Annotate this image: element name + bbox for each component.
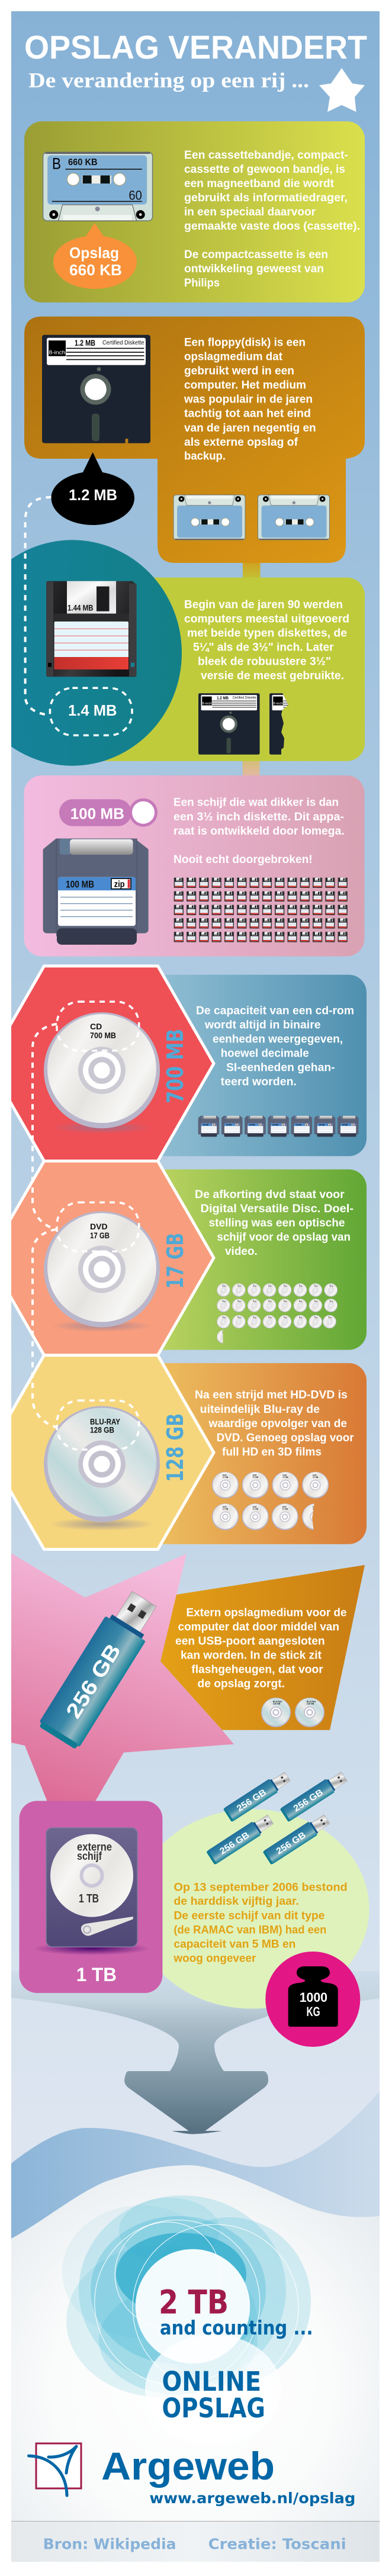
arrow tip xyxy=(172,2131,222,2134)
icon: usb stick: 256 GB xyxy=(61,1640,126,1722)
text: usb description: de opslag zorgt. xyxy=(198,1678,285,1690)
icon grid: cds xyxy=(217,1283,338,1344)
text: cassette description: De compactcassette is een xyxy=(184,249,328,261)
callout: 660 KB: 660 KB xyxy=(69,261,122,279)
heading: online opslag: OPSLAG xyxy=(162,2393,265,2424)
dashed bubble: 1.4 MB: 1.4 MB xyxy=(68,701,117,719)
text: zip description: raat is ontwikkeld door Iomega. xyxy=(173,825,345,838)
callout: 660 KB xyxy=(53,223,137,289)
brand name: Argeweb xyxy=(101,2444,275,2488)
text: floppy description: tachtig tot aan het eind xyxy=(184,408,311,420)
text: 3.5 inch description: met beide typen diskettes, de xyxy=(187,627,347,640)
panel: blu-ray text xyxy=(162,1363,367,1544)
text: blu-ray description: DVD. Genoeg opslag voor xyxy=(217,1432,354,1444)
panel: 3.5 inch floppy xyxy=(0,540,365,766)
teal circle xyxy=(0,540,182,766)
footer xyxy=(11,2521,380,2562)
callout: 1.2 MB: 1.2 MB xyxy=(69,486,117,504)
text: floppy description: opslagmedium dat xyxy=(184,350,283,363)
dvd disc group xyxy=(44,1202,160,1332)
text: usb description: flashgeheugen, dat voor xyxy=(191,1664,323,1676)
callout: 660 KB: Opslag xyxy=(69,244,119,262)
text: floppy description: van de jaren negentig en xyxy=(184,422,316,434)
text: cd description: teerd worden. xyxy=(221,1076,297,1089)
text: floppy description: backup. xyxy=(184,450,226,463)
subtitle: De verandering op een rij ... xyxy=(28,69,309,92)
capacity: 128 GB: 128 GB xyxy=(162,1413,188,1482)
text: hard disk description: capaciteit van 5 MB en xyxy=(173,1939,295,1951)
dashed bubble: 1.4 MB xyxy=(50,688,132,735)
text: cd description: SI-eenheden gehan- xyxy=(226,1062,335,1074)
connector xyxy=(243,563,261,578)
footer: Creatie: Toscani xyxy=(208,2536,346,2552)
text: usb description: Extern opslagmedium voor de xyxy=(186,1607,347,1619)
icon: cassette tape: 60 xyxy=(128,188,142,202)
logo icon xyxy=(28,2443,81,2496)
text: hard disk description: de harddisk vijftig jaar. xyxy=(173,1895,299,1908)
text: blu-ray description: full HD en 3D films xyxy=(222,1446,322,1458)
text: usb description: een USB-poort aangesloten xyxy=(175,1635,325,1648)
pink star xyxy=(11,1553,234,1802)
icon: hard disk xyxy=(34,1828,150,1955)
arrow xyxy=(11,1971,380,2133)
text: 3.5 inch description xyxy=(184,599,349,682)
text: zip description: Nooit echt doorgebroken! xyxy=(173,854,313,866)
icon grid: floppies xyxy=(174,878,348,942)
icon row: zip disks xyxy=(198,1116,359,1137)
text: floppy description: als externe opslag of xyxy=(184,436,298,449)
icon: floppy 5.25 xyxy=(42,335,150,443)
text: cassette description: gemaakte vaste doos (cassette). xyxy=(184,220,360,233)
text: cassette description: Een cassettebandje, compact- xyxy=(184,149,348,162)
text: floppy description: Een floppy(disk) is een xyxy=(184,336,306,349)
panel: cd text xyxy=(162,974,367,1157)
text: hard disk description xyxy=(173,1881,348,1965)
callout: 1.2 MB xyxy=(51,452,134,525)
heading: online opslag: ONLINE xyxy=(162,2366,261,2397)
text: hard disk description: Op 13 september 2006 bestond xyxy=(173,1881,348,1894)
icons: four usb sticks: 256 GB xyxy=(274,1830,308,1857)
icon: small floppy xyxy=(198,693,260,755)
icon: hard disk: externe xyxy=(77,1841,112,1853)
icon grid: dvds xyxy=(212,1471,329,1530)
hexagon: cd xyxy=(0,966,214,1161)
icon: weight 1000 kg xyxy=(265,1952,360,2047)
capacity: 700 MB: 700 MB xyxy=(162,1029,188,1103)
label: 1 TB: 1 TB xyxy=(76,1964,117,1985)
lower background xyxy=(11,2131,380,2190)
dvd disc group: DVD xyxy=(90,1222,108,1231)
text: cd description: hoewel decimale xyxy=(221,1048,309,1060)
icon: floppy 3.5 xyxy=(46,581,136,677)
text: cassette description: cassette of gewoon bandje, is xyxy=(184,163,345,176)
cd disc group: CD xyxy=(90,1022,102,1031)
text: 3.5 inch description: versie de meest gebruikte. xyxy=(201,670,344,682)
heading: 2 TB: 2 TB xyxy=(159,2284,229,2321)
text: 3.5 inch description: Begin van de jaren 90 werden xyxy=(184,599,343,611)
panel: cassette xyxy=(24,121,365,302)
text: dvd description: video. xyxy=(225,1245,258,1258)
text: dvd description: De afkorting dvd staat voor xyxy=(195,1189,345,1201)
panel: zip disk xyxy=(24,775,365,957)
icon: broken floppy xyxy=(269,693,288,755)
text: cd description: De capaciteit van een cd-rom xyxy=(196,1004,354,1017)
cd disc group xyxy=(44,1002,160,1134)
wave xyxy=(11,2091,380,2239)
text: hard disk description: (de RAMAC van IBM) had een xyxy=(173,1924,326,1936)
text: cassette description: gebruikt als informatiedrager, xyxy=(184,192,348,204)
background panel xyxy=(11,11,380,2166)
text: dvd description: stelling was een optische xyxy=(208,1217,345,1229)
dvd disc group: 17 GB xyxy=(90,1231,110,1240)
heading: online opslag xyxy=(162,2366,265,2424)
hexagon: blu-ray xyxy=(0,1355,214,1550)
text: usb description: kan worden. In de stick zit xyxy=(181,1650,322,1662)
panel: floppy xyxy=(24,317,365,563)
icon: cassette tape: 660 KB xyxy=(68,157,98,168)
icons: four usb sticks xyxy=(206,1770,349,1865)
text: cassette description: ontwikkeling geweest van xyxy=(184,263,324,275)
dashed line: floppy to 1.4 MB xyxy=(25,497,51,715)
icons: four usb sticks: 256 GB xyxy=(292,1787,325,1814)
text: usb description: computer dat door middel van xyxy=(178,1621,339,1634)
icon: cassette tape: B xyxy=(52,155,61,173)
dashed line: dvd to blu-ray xyxy=(33,1229,56,1427)
capacity: 17 GB: 17 GB xyxy=(162,1233,188,1289)
text: floppy description: gebruikt werd in een xyxy=(184,365,294,377)
text: cassette description: Philips xyxy=(184,277,220,289)
icon: hard disk: schijf xyxy=(77,1850,102,1863)
swirl graphic xyxy=(62,2195,311,2445)
icon: cassette tape xyxy=(43,152,153,221)
icons: four usb sticks: 256 GB xyxy=(235,1787,268,1814)
text: dvd description: Digital Versatile Disc. Doel- xyxy=(200,1203,354,1215)
panel: hard disk xyxy=(19,1801,162,1993)
icon: star xyxy=(319,68,365,112)
blu-ray disc group: 128 GB xyxy=(90,1425,114,1435)
text: cassette description xyxy=(184,149,360,289)
text: cd description xyxy=(196,1004,354,1089)
text: usb description xyxy=(175,1607,347,1690)
text: 3.5 inch description: computers meestal uitgevoerd xyxy=(184,613,349,626)
title: OPSLAG VERANDERT xyxy=(24,28,367,66)
hexagon: dvd xyxy=(0,1161,214,1355)
icon: weight 1000 kg: KG xyxy=(307,2004,320,2019)
text: blu-ray description: Na een strijd met HD-DVD is xyxy=(195,1389,348,1402)
icon: usb stick xyxy=(37,1586,164,1750)
white closing area xyxy=(11,2165,380,2522)
text: dvd description xyxy=(195,1189,354,1258)
icon: weight 1000 kg: 1000 xyxy=(300,1990,327,2005)
dashed line: 1.4 MB to cd xyxy=(33,1024,57,1229)
text: cd description: eenheden weergegeven, xyxy=(213,1033,343,1046)
text: 3.5 inch description: 5¼" als de 3½" inch. Later xyxy=(193,642,334,654)
text: zip description: Een schijf die wat dikker is dan xyxy=(173,797,339,809)
footer: Bron: Wikipedia xyxy=(43,2536,176,2552)
text: cassette description: een magneetband die wordt xyxy=(184,178,335,190)
text: blu-ray description: waardige opvolger van de xyxy=(208,1418,347,1430)
panel: dvd text xyxy=(162,1170,367,1350)
icon row: blu-ray discs xyxy=(261,1698,324,1727)
text: 3.5 inch description: bleek de robuustere 3½" xyxy=(198,656,331,668)
icon: hard disk: 1 TB xyxy=(79,1892,99,1905)
panel: usb text xyxy=(160,1565,365,1730)
text: blu-ray description xyxy=(195,1389,354,1458)
label: 100 MB: 100 MB xyxy=(70,804,124,822)
blu-ray disc group: BLU-RAY xyxy=(90,1416,121,1426)
label: 100 MB xyxy=(59,798,158,827)
text: zip description: een 3½ inch diskette. Dit appa- xyxy=(173,811,344,823)
url: www.argeweb.nl/opslag xyxy=(149,2490,355,2507)
text: floppy description: computer. Het medium xyxy=(184,379,306,392)
text: cd description: wordt altijd in binaire xyxy=(204,1019,321,1031)
lime circle xyxy=(134,1809,369,2009)
blu-ray disc group xyxy=(44,1400,160,1531)
text: floppy description: was populair in de jaren xyxy=(184,394,313,406)
text: hard disk description: woog ongeveer xyxy=(173,1953,256,1965)
cd disc group: 700 MB xyxy=(90,1031,116,1040)
text: dvd description: schijf voor de opslag van xyxy=(217,1231,351,1244)
icon: two cassettes xyxy=(173,495,329,540)
text: blu-ray description: uiteindelijk Blu-ray de xyxy=(200,1403,320,1416)
text: hard disk description: De eerste schijf van dit type xyxy=(173,1910,324,1923)
icons: four usb sticks: 256 GB xyxy=(218,1830,251,1857)
text: and counting: and counting ... xyxy=(160,2316,313,2339)
icon: zip disk xyxy=(43,839,149,945)
text: zip description xyxy=(173,797,345,866)
connector xyxy=(243,761,259,775)
text: cassette description: in een speciaal daarvoor xyxy=(184,206,316,218)
text: floppy description xyxy=(184,336,316,463)
